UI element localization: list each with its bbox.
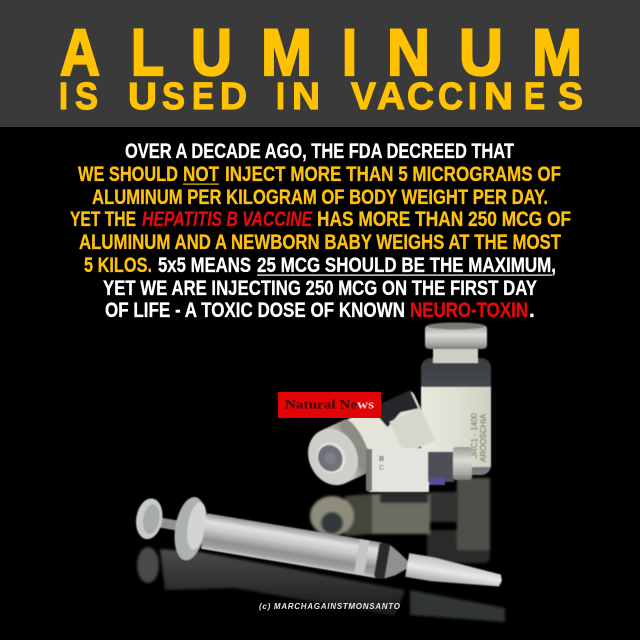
- body paragraph: YET THE: [70, 208, 136, 231]
- subtitle: IS USED IN VACCINES: [59, 76, 583, 118]
- subtitle: IS USED IN VACCINES: S: [558, 76, 583, 118]
- body paragraph: NEURO-TOXIN: [410, 299, 528, 322]
- body paragraph: OF LIFE - A TOXIC DOSE OF KNOWN: [105, 299, 405, 322]
- vial: lying on its side: [299, 388, 436, 493]
- title: ALUMINUM: L: [131, 15, 164, 89]
- body paragraph: INJECT MORE THAN 5 MICROGRAMS OF: [225, 163, 561, 186]
- vial: small: C: [379, 465, 384, 472]
- body paragraph: YET WE ARE INJECTING 250 MCG ON THE FIRST DAY: [103, 277, 537, 300]
- reflections of vials and syringe: [137, 478, 505, 622]
- body paragraph: HEPATITIS B VACCINE: [142, 208, 313, 231]
- copyright credit: (c) MARCHAGAINSTMONSANTO: [259, 602, 401, 611]
- subtitle: IS USED IN VACCINES: A: [377, 76, 405, 118]
- body paragraph: OVER A DECADE AGO, THE FDA DECREED THAT: [125, 140, 514, 163]
- subtitle: IS USED IN VACCINES: I: [468, 76, 477, 118]
- subtitle: IS USED IN VACCINES: U: [128, 76, 157, 118]
- subtitle: IS USED IN VACCINES: I: [59, 76, 68, 118]
- title: ALUMINUM: U: [459, 15, 503, 89]
- subtitle: IS USED IN VACCINES: N: [484, 76, 513, 118]
- subtitle: IS USED IN VACCINES: V: [351, 76, 377, 118]
- subtitle: IS USED IN VACCINES: D: [220, 76, 247, 118]
- body paragraph: 5x5 MEANS: [158, 254, 251, 277]
- vial: small: [366, 447, 472, 492]
- title: ALUMINUM: N: [387, 15, 430, 89]
- subtitle: IS USED IN VACCINES: S: [75, 76, 98, 118]
- body paragraph: .: [529, 299, 535, 322]
- subtitle: IS USED IN VACCINES: N: [292, 76, 320, 118]
- title: ALUMINUM: I: [342, 15, 357, 89]
- source tag: Natural News: [278, 392, 381, 418]
- title: ALUMINUM: M: [261, 15, 312, 89]
- syringe: [131, 488, 507, 612]
- title: ALUMINUM: U: [191, 15, 232, 89]
- header band: [0, 0, 640, 127]
- body paragraph: WE SHOULD: [78, 163, 178, 186]
- body paragraph: HAS MORE THAN 250 MCG OF: [317, 208, 571, 231]
- vial handwriting: JRC1 - 1400: [470, 413, 479, 458]
- body paragraph: 5 KILOS.: [84, 254, 152, 277]
- vial: small: B: [379, 456, 384, 463]
- body paragraph: NOT: [183, 163, 219, 186]
- vial: upright: [421, 322, 491, 475]
- subtitle: IS USED IN VACCINES: C: [438, 76, 463, 118]
- body paragraph: 25 MCG SHOULD BE THE MAXIMUM,: [257, 254, 556, 277]
- title: ALUMINUM: [60, 15, 582, 89]
- subtitle: IS USED IN VACCINES: I: [276, 76, 285, 118]
- source tag: Natural News: Natural Ne ws: [285, 396, 374, 412]
- subtitle: IS USED IN VACCINES: S: [162, 76, 185, 118]
- vial handwriting: AROOSCHIA: [479, 413, 488, 462]
- subtitle: IS USED IN VACCINES: E: [192, 76, 214, 118]
- vial handwriting: [470, 413, 488, 462]
- subtitle: IS USED IN VACCINES: C: [407, 76, 434, 118]
- body paragraph: [70, 140, 571, 322]
- title: ALUMINUM: A: [60, 15, 100, 89]
- title: ALUMINUM: M: [532, 15, 582, 89]
- subtitle: IS USED IN VACCINES: E: [524, 76, 545, 118]
